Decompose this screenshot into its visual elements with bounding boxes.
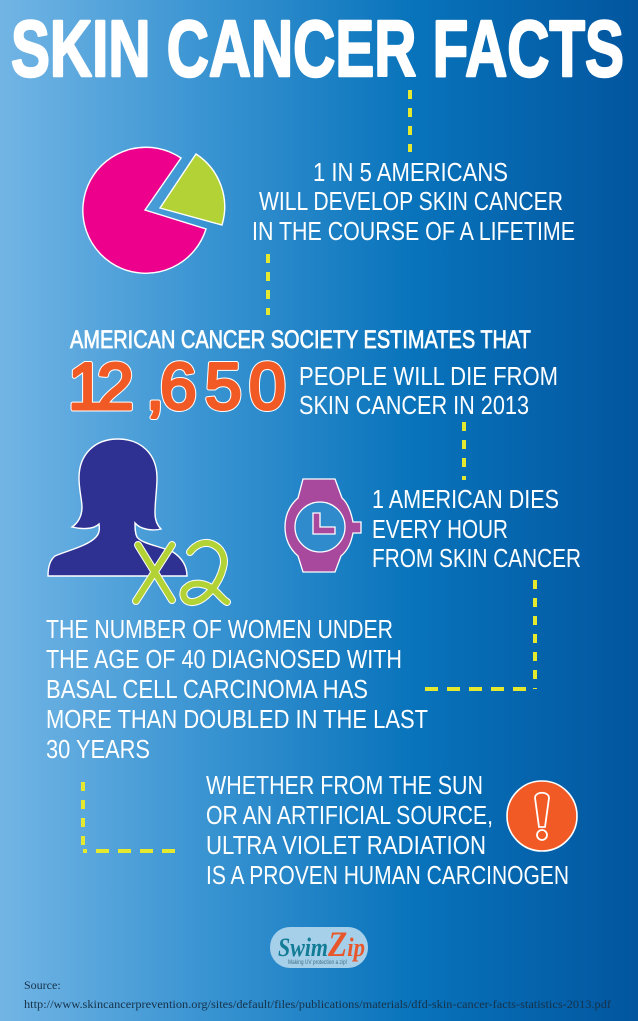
- icon: exclamation: [507, 781, 577, 851]
- connector: title to fact 1: [408, 90, 412, 152]
- source note: Source:: [24, 978, 61, 992]
- text: women under 40: [46, 614, 428, 764]
- label: x2: [136, 543, 227, 602]
- text: people will die: [299, 361, 558, 420]
- source note: [24, 978, 611, 1011]
- icon: watch: [285, 479, 361, 572]
- text: 1 american dies: EVERY HOUR: [372, 514, 508, 544]
- text: people will die: SKIN CANCER IN 2013: [299, 390, 529, 420]
- text: 1 in 5 americans: 1 IN 5 AMERICANS: [313, 157, 508, 187]
- text: 1 in 5 americans: WILL DEVELOP SKIN CANCER: [259, 186, 563, 216]
- text: 1 american dies: [372, 484, 581, 573]
- connector: deaths to hourly fact: [462, 422, 466, 480]
- logo: swimzip: Zip: [327, 924, 365, 964]
- text: women under 40: MORE THAN DOUBLED IN THE LAST: [46, 704, 428, 734]
- connector: women fact to radiation fact: [83, 782, 175, 851]
- text: 1 american dies: 1 AMERICAN DIES: [372, 484, 559, 514]
- text: women under 40: BASAL CELL CARCINOMA HAS: [46, 674, 368, 704]
- icon: woman silhouette: [48, 439, 187, 576]
- text: women under 40: THE NUMBER OF WOMEN UNDER: [46, 614, 393, 644]
- connector: hourly fact to women fact: [425, 580, 535, 689]
- text: 1 in 5 americans: IN THE COURSE OF A LIFETIME: [252, 216, 575, 246]
- text: ultra violet radiation: OR AN ARTIFICIAL SOURCE,: [206, 800, 493, 830]
- connector: fact 1 to society estimate: [266, 254, 270, 315]
- text: 1 american dies: FROM SKIN CANCER: [372, 543, 581, 573]
- logo: swimzip: [270, 924, 368, 968]
- text: ultra violet radiation: ULTRA VIOLET RADIATION: [206, 830, 486, 860]
- source note: http://www.skincancerprevention.org/sites/default/files/publications/materials/dfd-skin-cancer-facts-statistics-2013.pdf: [24, 997, 611, 1011]
- heading: american cancer society: AMERICAN CANCER SOCIETY ESTIMATES THAT: [70, 326, 531, 354]
- big number: 12,650: 12,650: [68, 349, 286, 423]
- logo: swimzip: Making UV protection a zip!: [288, 960, 347, 966]
- text: women under 40: 30 YEARS: [46, 734, 150, 764]
- big number: 12,650: 12,650: [68, 349, 286, 423]
- text: 1 in 5 americans: [252, 157, 575, 246]
- text: ultra violet radiation: WHETHER FROM THE SUN: [206, 770, 483, 800]
- icon: pie chart: [83, 147, 225, 273]
- text: ultra violet radiation: [206, 770, 569, 890]
- text: people will die: PEOPLE WILL DIE FROM: [299, 361, 558, 391]
- logo: swimzip: Swim: [278, 933, 328, 962]
- text: women under 40: THE AGE OF 40 DIAGNOSED WITH: [46, 644, 402, 674]
